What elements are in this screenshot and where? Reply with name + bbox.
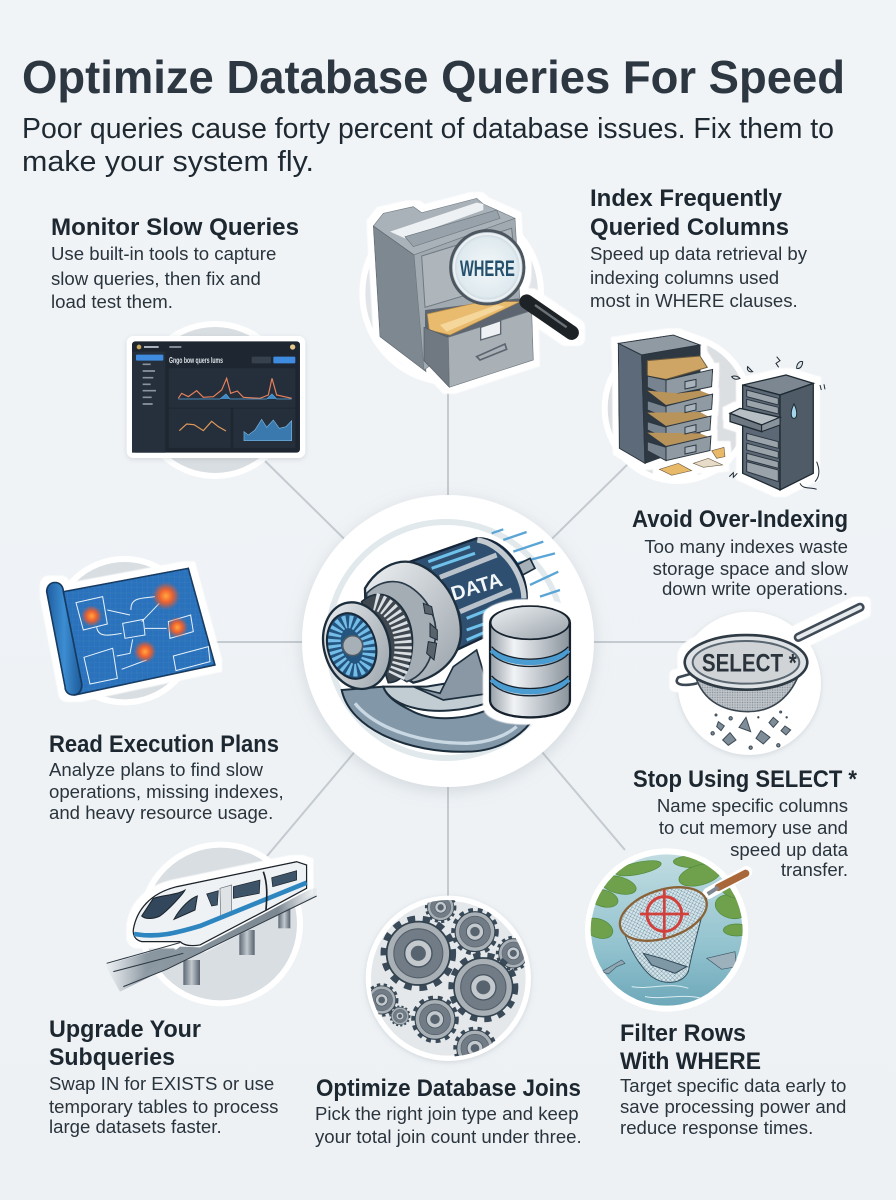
icon: strainer with SELECT * — [677, 607, 860, 755]
heading — [590, 185, 789, 241]
heading — [620, 1020, 761, 1075]
heading — [49, 1016, 201, 1071]
icon: filing cabinet with magnifier — [362, 198, 572, 387]
panel: monitor slow queries — [51, 214, 305, 476]
text block: save processing power and — [620, 1096, 846, 1117]
guideway under the train — [123, 887, 317, 987]
icon: blueprint with hot spots — [47, 559, 215, 702]
text block: Too many indexes waste — [644, 536, 848, 557]
connector lines — [215, 350, 690, 910]
text block: Swap IN for EXISTS or use — [49, 1073, 274, 1094]
heading: Stop Using SELECT * — [633, 766, 857, 793]
text block: speed up data — [730, 839, 849, 860]
chart: blue area — [244, 419, 292, 441]
text: WHERE: WHERE — [460, 256, 515, 281]
text block — [590, 243, 808, 311]
text block: load test them. — [51, 291, 173, 312]
subtitle: Poor queries cause forty percent of database issues. Fix them to — [22, 113, 834, 145]
icon: overstuffed cabinet and strained server — [605, 335, 825, 490]
panel: read execution plans — [47, 559, 284, 823]
panel: filter rows with where — [581, 851, 846, 1138]
text block: your total join count under three. — [315, 1126, 582, 1147]
panel: index frequently queried columns — [362, 185, 808, 387]
text block — [620, 1075, 846, 1138]
text block: Pick the right join type and keep — [315, 1103, 579, 1124]
text: SELECT *: SELECT * — [702, 650, 797, 678]
panel: upgrade your subqueries — [49, 845, 317, 1137]
text block: Use built-in tools to capture — [51, 243, 276, 264]
text block: transfer. — [781, 859, 848, 880]
text block: slow queries, then fix and — [51, 268, 261, 289]
heading: Index Frequently — [590, 185, 782, 212]
text: dashboard heading: Gngo bow quers lums — [169, 356, 223, 365]
heading: Avoid Over-Indexing — [632, 506, 848, 533]
text block: indexing columns used — [590, 267, 779, 288]
text: DATA: DATA — [449, 569, 505, 605]
text block: large datasets faster. — [49, 1116, 222, 1137]
heading: Queried Columns — [590, 214, 789, 241]
text block: reduce response times. — [620, 1117, 813, 1138]
text block: Target specific data early to — [620, 1075, 846, 1096]
heading: Read Execution Plans — [49, 731, 279, 758]
text block — [644, 536, 849, 599]
text block: operations, missing indexes, — [49, 781, 284, 802]
text block — [51, 243, 276, 312]
text block: to cut memory use and — [659, 817, 848, 838]
text block: most in WHERE clauses. — [590, 290, 798, 311]
heading: Subqueries — [49, 1044, 175, 1071]
icon: fishing net over stream — [581, 851, 751, 1009]
text block — [315, 1103, 582, 1147]
heading: Upgrade Your — [49, 1016, 201, 1043]
chart: response time spikes — [178, 378, 292, 398]
text block: Speed up data retrieval by — [590, 243, 808, 264]
text block: and heavy resource usage. — [49, 802, 273, 823]
text block: down write operations. — [662, 578, 848, 599]
text block — [49, 759, 284, 823]
panel: optimize database joins — [315, 893, 582, 1147]
heading: Filter Rows — [620, 1020, 746, 1047]
icon: monitoring dashboard — [127, 324, 305, 476]
title: Optimize Database Queries For Speed — [22, 51, 845, 103]
heading: Monitor Slow Queries — [51, 214, 299, 241]
heading: With WHERE — [620, 1048, 761, 1075]
icon: filtered particles — [711, 711, 791, 749]
subtitle: make your system fly. — [22, 146, 314, 178]
text block: Name specific columns — [657, 795, 848, 816]
icon: elevated high-speed train — [105, 845, 317, 1003]
panel: stop using select star — [633, 607, 860, 880]
icon: interlocking gears — [367, 893, 529, 1068]
text block — [49, 1073, 278, 1137]
panel: central engine hub — [302, 495, 594, 787]
text block: storage space and slow — [653, 558, 849, 579]
text block — [657, 795, 849, 880]
text block: Analyze plans to find slow — [49, 759, 264, 780]
heading: Optimize Database Joins — [316, 1075, 581, 1102]
panel: avoid over-indexing — [605, 335, 849, 599]
chart: orange line — [179, 421, 226, 431]
text block: temporary tables to process — [49, 1096, 278, 1117]
icon: data engine with database — [314, 529, 570, 752]
subtitle — [22, 113, 834, 178]
